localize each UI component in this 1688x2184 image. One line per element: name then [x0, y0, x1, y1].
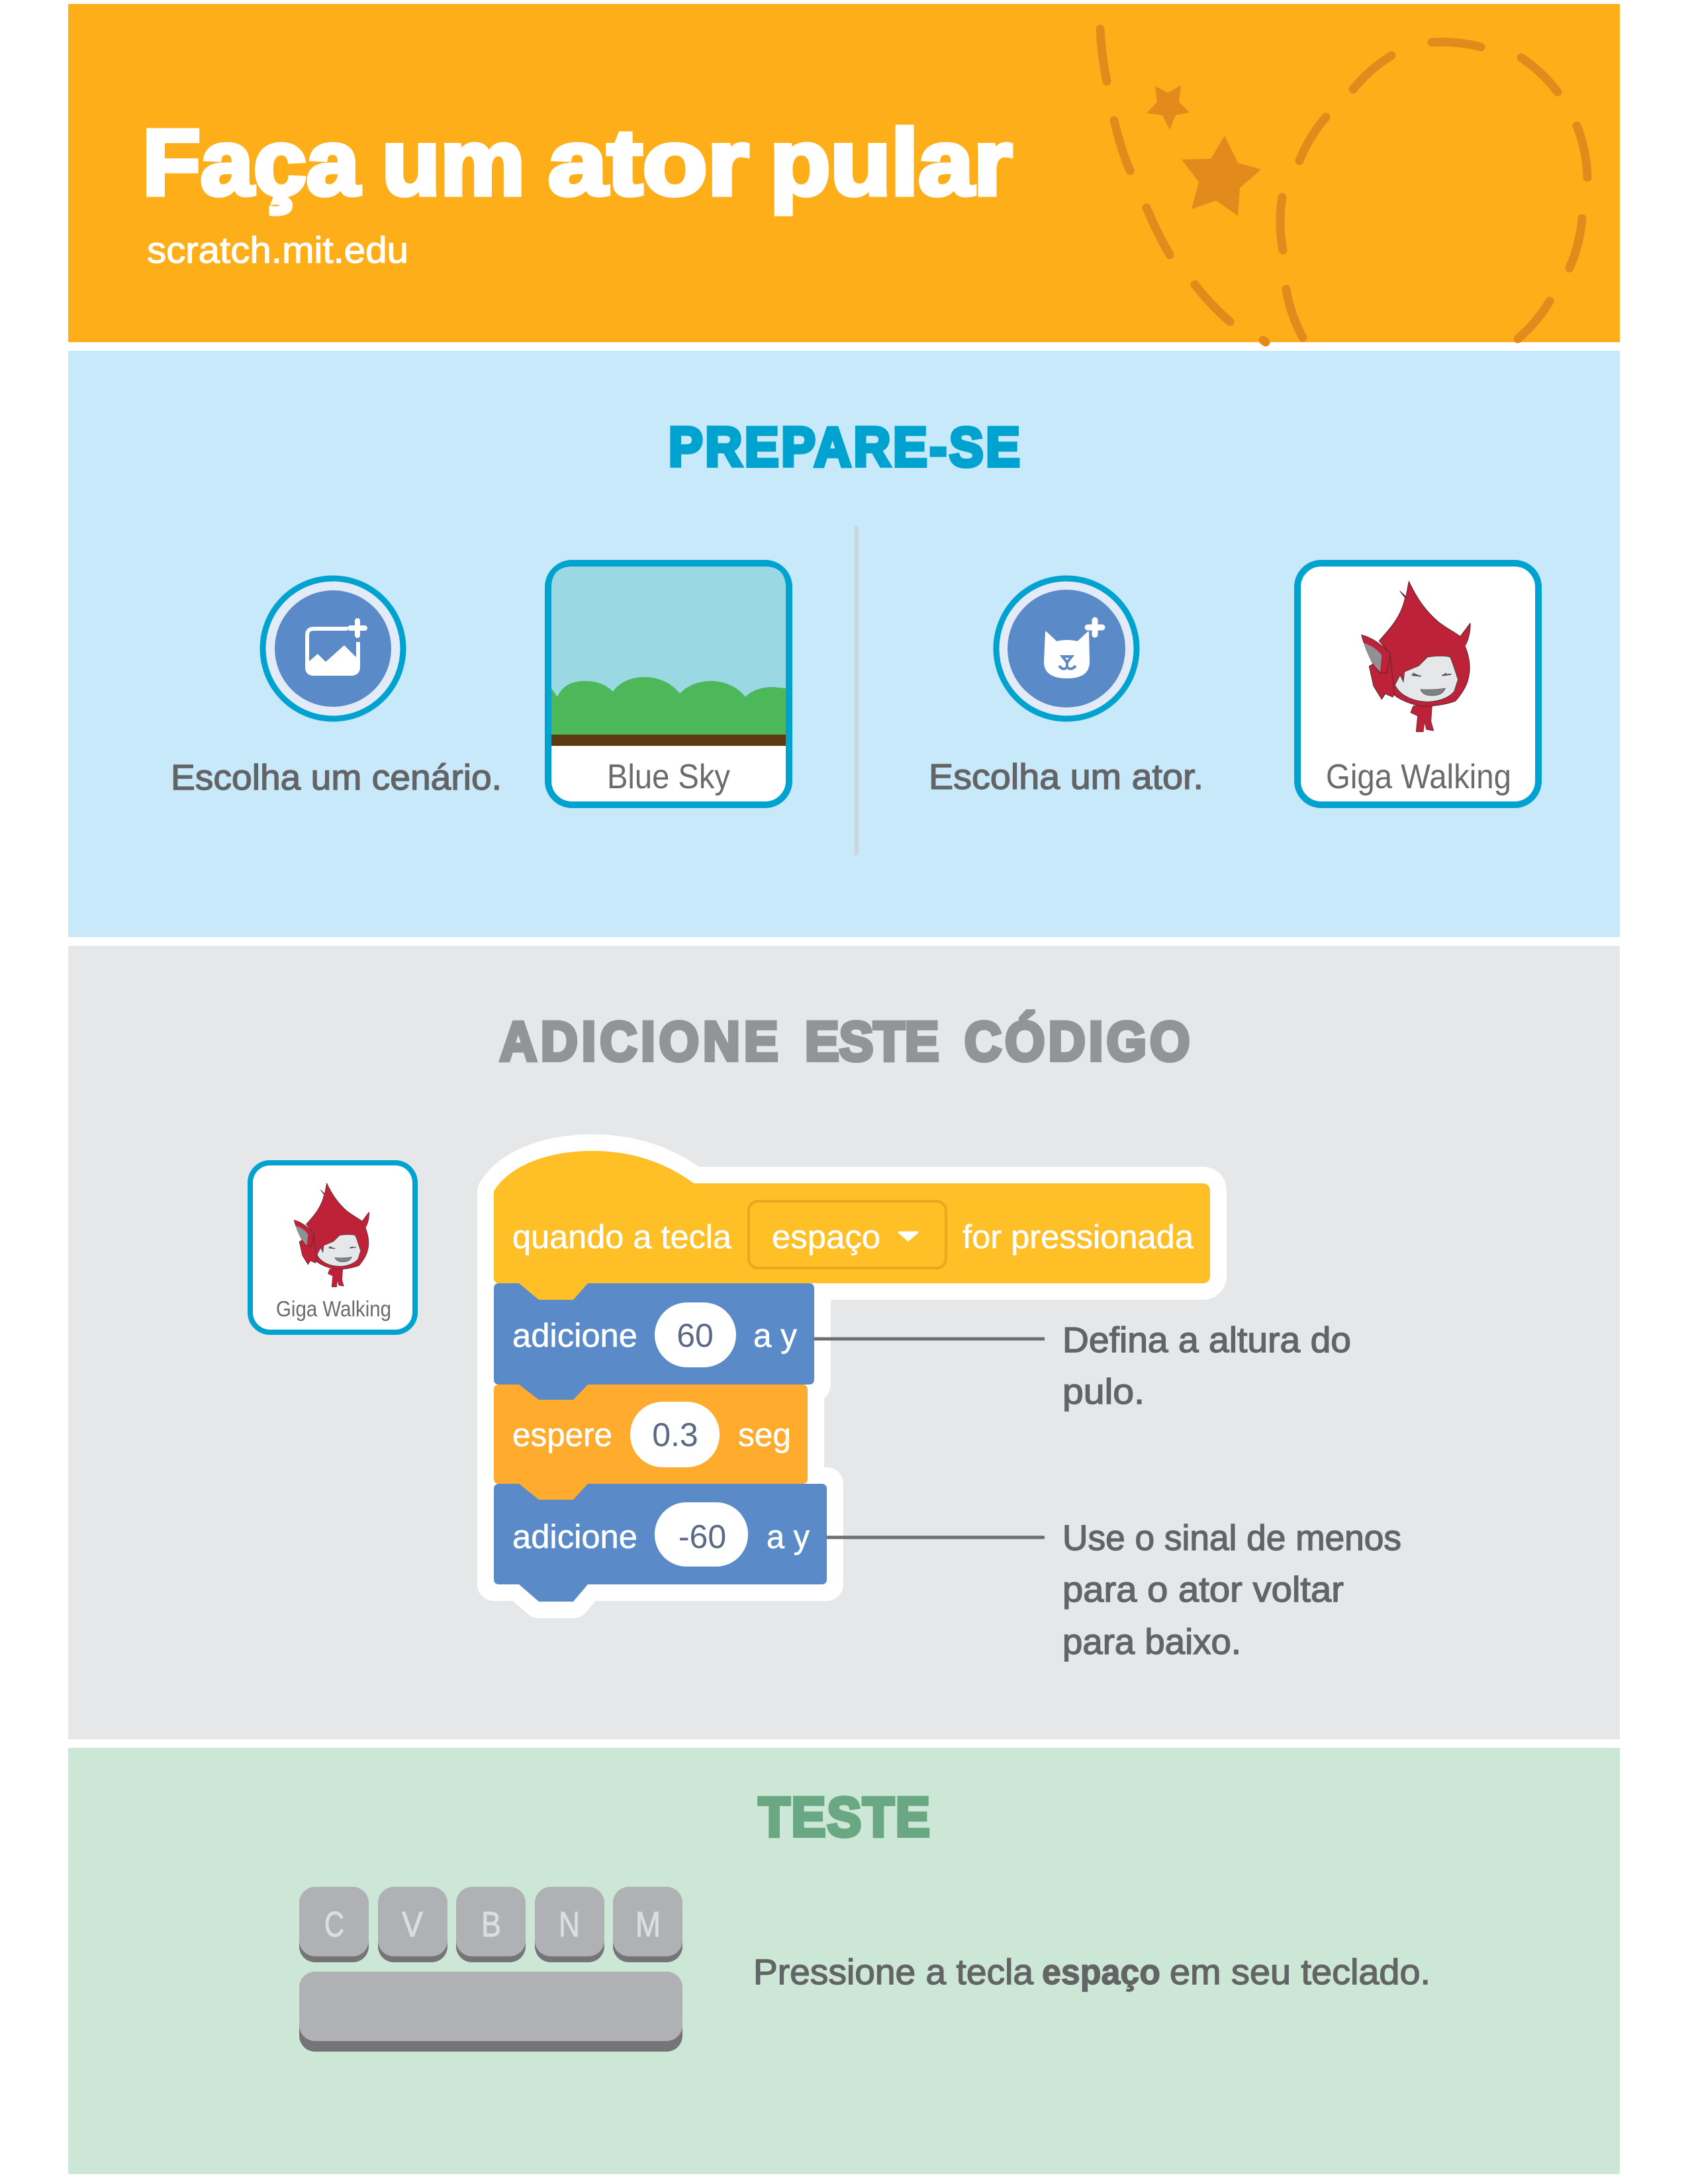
panel: header	[68, 4, 1620, 342]
card label: Giga Walking	[276, 1297, 391, 1321]
icon: choose sprite	[996, 578, 1137, 719]
title: um	[382, 110, 525, 214]
card label: Blue Sky	[607, 758, 730, 796]
decorative dashed jump path and stars	[1100, 29, 1587, 342]
title: pular	[770, 110, 1012, 214]
block: wait: 0.3	[652, 1416, 698, 1453]
instruction: press space: em seu teclado.	[1170, 1952, 1430, 1992]
icon: choose backdrop	[263, 578, 403, 719]
panel: add code	[68, 946, 1620, 1739]
block: change y 60: adicione	[512, 1317, 637, 1354]
keyboard illustration: M	[635, 1905, 661, 1944]
callout: minus sign	[1062, 1518, 1401, 1662]
panel: test	[68, 1748, 1620, 2174]
keyboard illustration: N	[559, 1905, 580, 1944]
callout: jump height: pulo.	[1062, 1372, 1145, 1412]
block: when key pressed	[494, 1151, 1210, 1300]
title: Faça	[142, 110, 361, 214]
card: Giga Walking sprite	[1297, 563, 1538, 805]
divider	[855, 526, 859, 855]
keyboard illustration: V	[402, 1905, 423, 1944]
sprite: Giga small	[294, 1183, 369, 1287]
keyboard illustration: B	[481, 1905, 501, 1944]
heading: add code: ADICIONE	[500, 1011, 778, 1073]
block: change y -60: a y	[767, 1518, 810, 1555]
code blocks	[494, 1151, 1210, 1602]
card: small sprite	[250, 1163, 415, 1332]
callout: jump height	[1062, 1320, 1351, 1412]
block: wait: seg	[738, 1416, 791, 1453]
block: change y 60	[494, 1283, 814, 1400]
block: when key pressed: for pressionada	[962, 1218, 1194, 1255]
callout: minus sign: para o ator voltar	[1062, 1570, 1344, 1610]
block: change y -60: -60	[679, 1518, 726, 1555]
block: change y 60: 60	[677, 1317, 714, 1354]
keyboard illustration	[299, 1887, 682, 2052]
card label: Giga Walking	[1326, 758, 1511, 796]
instruction: press space: Pressione a tecla	[753, 1952, 1034, 1992]
block: wait	[494, 1385, 808, 1500]
label: choose backdrop: Escolha um cenário.	[171, 758, 502, 797]
heading: test: TESTE	[759, 1786, 930, 1848]
callout: minus sign: Use o sinal de menos	[1062, 1518, 1401, 1558]
title: ator	[548, 110, 749, 214]
block: change y 60: a y	[753, 1317, 797, 1354]
block outline	[494, 1151, 1210, 1602]
block: when key pressed: espaço	[772, 1218, 880, 1255]
card: Blue Sky backdrop	[548, 563, 789, 805]
heading: add code: ESTE	[805, 1011, 939, 1073]
label: choose sprite: Escolha um ator.	[929, 757, 1203, 797]
heading: add code: CÓDIGO	[964, 1010, 1190, 1073]
instruction: press space: espaço	[1042, 1952, 1160, 1992]
heading: prepare: PREPARE-SE	[669, 416, 1020, 478]
block: when key pressed: quando a tecla	[512, 1218, 731, 1255]
instruction: press space	[753, 1952, 1430, 1992]
block: change y -60: adicione	[512, 1518, 637, 1555]
panel: prepare	[68, 351, 1620, 937]
keyboard illustration: C	[324, 1905, 344, 1944]
block: wait: espere	[512, 1416, 612, 1453]
heading: add code	[500, 1010, 1190, 1073]
connector lines	[814, 1339, 1045, 1537]
subtitle url: scratch.mit.edu	[147, 229, 408, 271]
callout: jump height: Defina a altura do	[1062, 1320, 1351, 1360]
block: change y -60	[494, 1484, 827, 1602]
sprite: Giga	[1362, 581, 1470, 732]
title	[142, 110, 1012, 214]
callout: minus sign: para baixo.	[1062, 1622, 1241, 1662]
